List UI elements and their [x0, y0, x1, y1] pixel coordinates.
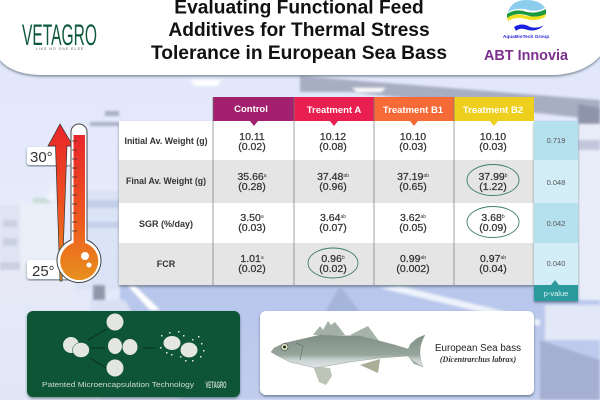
shelf — [0, 205, 55, 290]
row labels — [124, 136, 208, 269]
illustration: sea bass — [271, 321, 425, 385]
table values: (0.05) — [399, 222, 427, 234]
label: 25 degrees — [27, 260, 71, 280]
table values: a — [261, 255, 264, 261]
table values: (0.03) — [479, 141, 507, 153]
arrow: rising temperature — [48, 124, 73, 281]
table values: (0.04) — [479, 263, 507, 275]
table values — [237, 131, 508, 275]
table values: (0.65) — [399, 181, 427, 193]
table values: (0.28) — [238, 181, 266, 193]
panel: European sea bass — [260, 311, 534, 395]
panel: microencapsulation technology — [27, 311, 240, 397]
row labels: FCR — [157, 259, 176, 269]
table values: (0.07) — [319, 222, 347, 234]
table values: b — [505, 173, 508, 179]
table values: 37.19 — [397, 171, 423, 183]
table values: 0.97 — [480, 253, 500, 265]
floor — [120, 285, 600, 400]
p-value column: 0.048 — [547, 178, 565, 187]
table body — [119, 121, 534, 285]
table values: 10.10 — [400, 131, 426, 143]
table values: 3.68 — [481, 212, 502, 224]
table values: (0.03) — [238, 222, 266, 234]
table values: 10.11 — [239, 131, 265, 143]
row labels: Initial Av. Weight (g) — [124, 136, 208, 146]
logo: Vetagro: LIKE NO ONE ELSE — [36, 47, 84, 51]
header banner — [0, 0, 600, 75]
logo: ABT Innovia — [484, 0, 569, 64]
column headers: Treatment B2 — [463, 105, 523, 116]
table values: 35.66 — [237, 171, 264, 183]
label: 30 degrees — [27, 147, 71, 166]
table values: ab — [500, 255, 506, 261]
p-value column: 0.042 — [547, 219, 565, 228]
species name: (Dicentrarchus labrax) — [440, 355, 516, 364]
icon: AquaBioTech globe — [507, 0, 546, 31]
row labels: SGR (%/day) — [139, 219, 193, 229]
table values: ab — [340, 214, 346, 220]
p-value column: 0.040 — [547, 259, 565, 268]
label: 25 degrees: 25° — [32, 263, 55, 280]
thermometer — [27, 124, 101, 282]
species name: European Sea bass — [435, 343, 521, 354]
table values: (0.02) — [238, 141, 266, 153]
table values: (1.22) — [479, 181, 507, 193]
table values: 3.64 — [320, 212, 340, 224]
table values: (0.002) — [396, 263, 430, 275]
table values: b — [502, 214, 505, 220]
table values: 37.48 — [317, 171, 343, 183]
table values: ab — [420, 214, 426, 220]
results table — [119, 97, 578, 301]
logo: Vetagro: VETAGRO — [22, 19, 97, 52]
table values: (0.02) — [238, 263, 266, 275]
logo: ABT Innovia: ABT Innovia — [484, 48, 569, 64]
table values: (0.03) — [399, 141, 427, 153]
table values: ab — [423, 173, 429, 179]
tube and bulb — [57, 124, 101, 282]
logo: Vetagro — [22, 19, 97, 52]
table values: 37.99 — [478, 171, 505, 183]
table values: 3.50 — [240, 212, 261, 224]
column headers: Treatment A — [307, 105, 361, 116]
column headers: Treatment B1 — [383, 105, 444, 116]
table values: 10.12 — [320, 131, 346, 143]
panel: microencapsulation technology: VETAGRO — [206, 380, 226, 390]
microcapsule diagram — [63, 314, 204, 376]
title: Additives for Thermal Stress — [168, 20, 430, 41]
table values: 10.10 — [480, 131, 506, 143]
table values: 3.62 — [400, 212, 420, 224]
table values: (0.08) — [319, 141, 347, 153]
table values: (0.09) — [479, 222, 507, 234]
column headers: Control — [234, 104, 268, 115]
right wall — [578, 104, 600, 124]
table values: a — [264, 173, 267, 179]
p-value column — [534, 121, 578, 301]
column headers — [213, 97, 534, 126]
p-value column: p-value — [544, 289, 568, 298]
label: 30 degrees: 30° — [30, 149, 53, 166]
species name — [435, 343, 521, 364]
table values: ab — [420, 255, 426, 261]
title: Tolerance in European Sea Bass — [151, 43, 447, 64]
table values: 1.01 — [240, 253, 261, 265]
table values: 0.99 — [400, 253, 420, 265]
row labels: Final Av. Weight (g) — [126, 176, 206, 186]
p-value column: 0.719 — [547, 136, 565, 145]
table values: (0.96) — [319, 181, 347, 193]
table values: 0.96 — [321, 253, 342, 265]
caption: Patented Microencapsulation Technology — [42, 380, 194, 389]
table values: ab — [343, 173, 349, 179]
table values: b — [342, 255, 345, 261]
title — [151, 0, 447, 64]
table values: a — [261, 214, 264, 220]
logo: ABT Innovia: AquaBioTech Group — [503, 34, 549, 40]
table values: (0.02) — [319, 263, 347, 275]
significance ellipses — [308, 164, 519, 278]
